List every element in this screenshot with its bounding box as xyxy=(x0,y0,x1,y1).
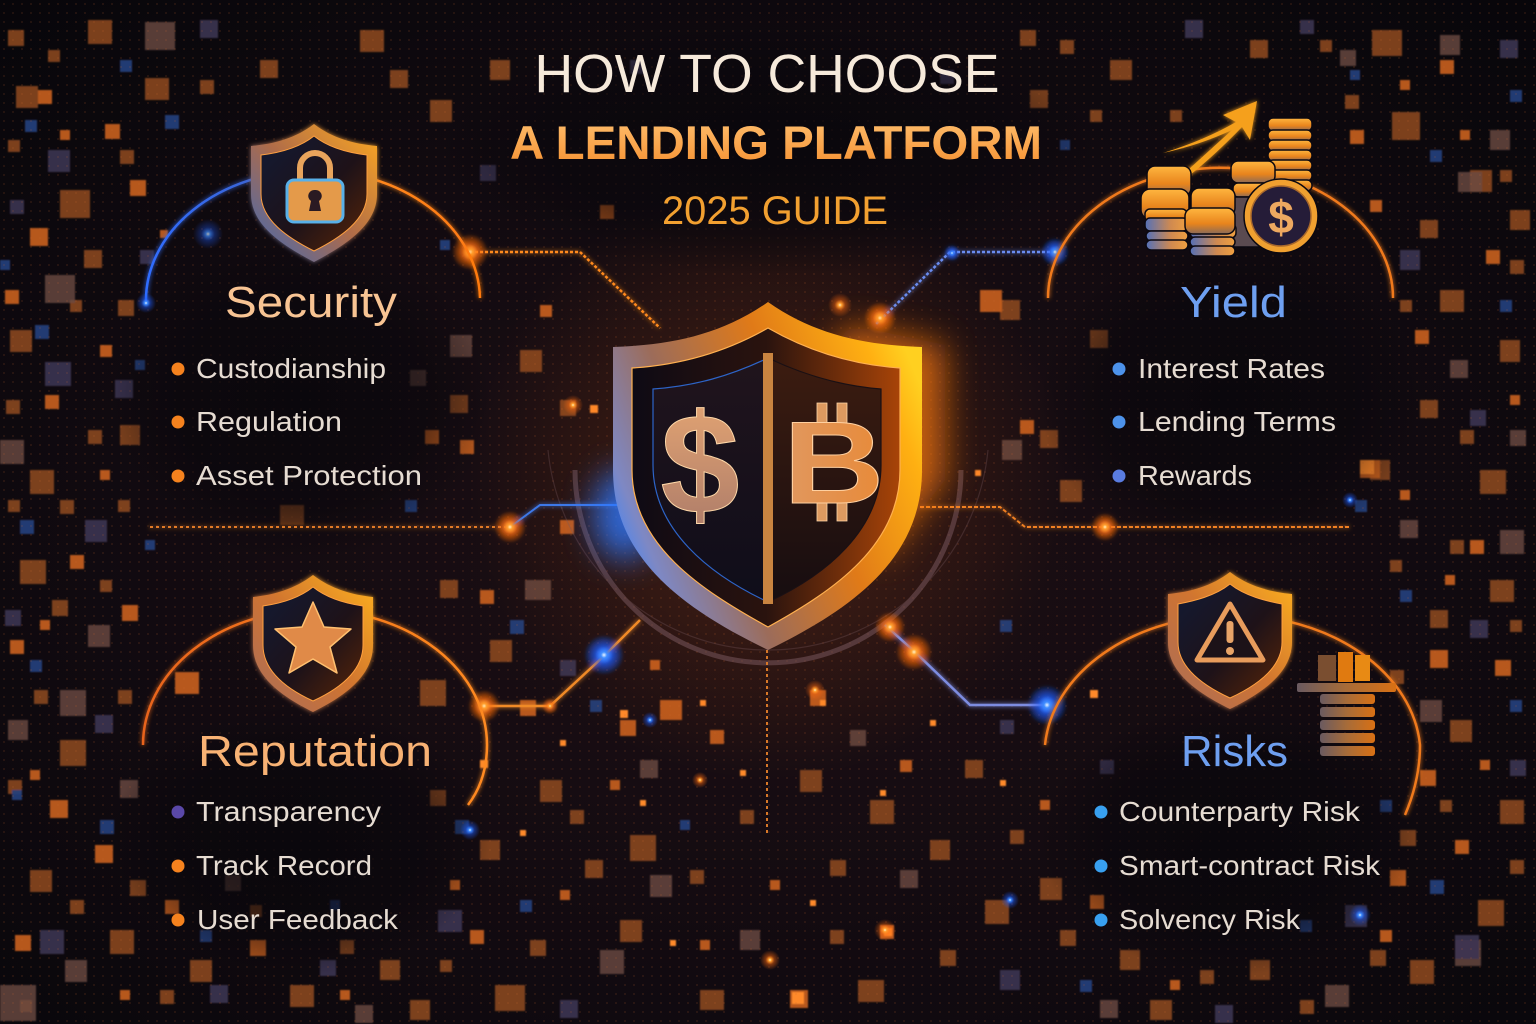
bitcoin symbol: B xyxy=(783,398,884,528)
list: security: Asset Protection xyxy=(196,460,422,491)
list: security xyxy=(172,353,422,491)
arc: security xyxy=(136,170,480,313)
list: security: Regulation xyxy=(196,406,342,437)
connector: right horizontal xyxy=(920,507,1350,541)
icon: lock shield xyxy=(251,124,377,262)
connector: reputation to centre xyxy=(468,620,640,722)
heading: yield: Yield xyxy=(1180,278,1287,327)
title line 3: 2025 GUIDE xyxy=(662,189,888,233)
list: reputation: Track Record xyxy=(196,850,372,881)
icon: warning shield xyxy=(1168,572,1292,709)
central shield xyxy=(593,302,945,650)
list: risks xyxy=(1094,796,1381,935)
dollar symbol: $ xyxy=(661,385,739,544)
panel: yield xyxy=(1112,101,1336,491)
connector: bottom vertical xyxy=(766,650,768,835)
list: risks: Counterparty Risk xyxy=(1119,796,1361,827)
connector: yield to centre xyxy=(864,238,1069,334)
list: reputation xyxy=(172,796,399,935)
icon: star shield xyxy=(253,575,373,712)
list: risks: Solvency Risk xyxy=(1119,904,1301,935)
list: reputation: Transparency xyxy=(196,796,381,827)
panel: security xyxy=(172,124,422,491)
panel: risks xyxy=(1094,572,1396,935)
icon: coins and arrow: $ xyxy=(1268,191,1294,243)
heading: security: Security xyxy=(225,278,397,327)
panel: reputation xyxy=(172,575,432,935)
title line 2: A LENDING PLATFORM xyxy=(510,116,1042,169)
title line 1: HOW TO CHOOSE xyxy=(534,44,1000,104)
icon: pedestal with coin stack xyxy=(1297,652,1396,756)
title xyxy=(510,44,1042,233)
connector: security to centre xyxy=(452,234,660,328)
heading: reputation: Reputation xyxy=(198,727,432,776)
arc: reputation xyxy=(143,610,487,805)
list: yield xyxy=(1112,353,1336,491)
arc: yield xyxy=(1048,168,1393,298)
icon: coins and arrow xyxy=(1141,101,1318,256)
connector: left horizontal xyxy=(150,505,620,543)
arc: risks xyxy=(1045,615,1420,815)
list: yield: Lending Terms xyxy=(1138,406,1336,437)
heading: risks: Risks xyxy=(1181,727,1288,776)
list: yield: Rewards xyxy=(1138,460,1252,491)
list: reputation: User Feedback xyxy=(197,904,399,935)
list: yield: Interest Rates xyxy=(1138,353,1325,384)
list: risks: Smart-contract Risk xyxy=(1119,850,1381,881)
list: security: Custodianship xyxy=(196,353,386,384)
shield divider xyxy=(763,353,773,604)
background rings around central shield xyxy=(548,450,988,663)
connector: risks to centre xyxy=(875,612,1067,725)
